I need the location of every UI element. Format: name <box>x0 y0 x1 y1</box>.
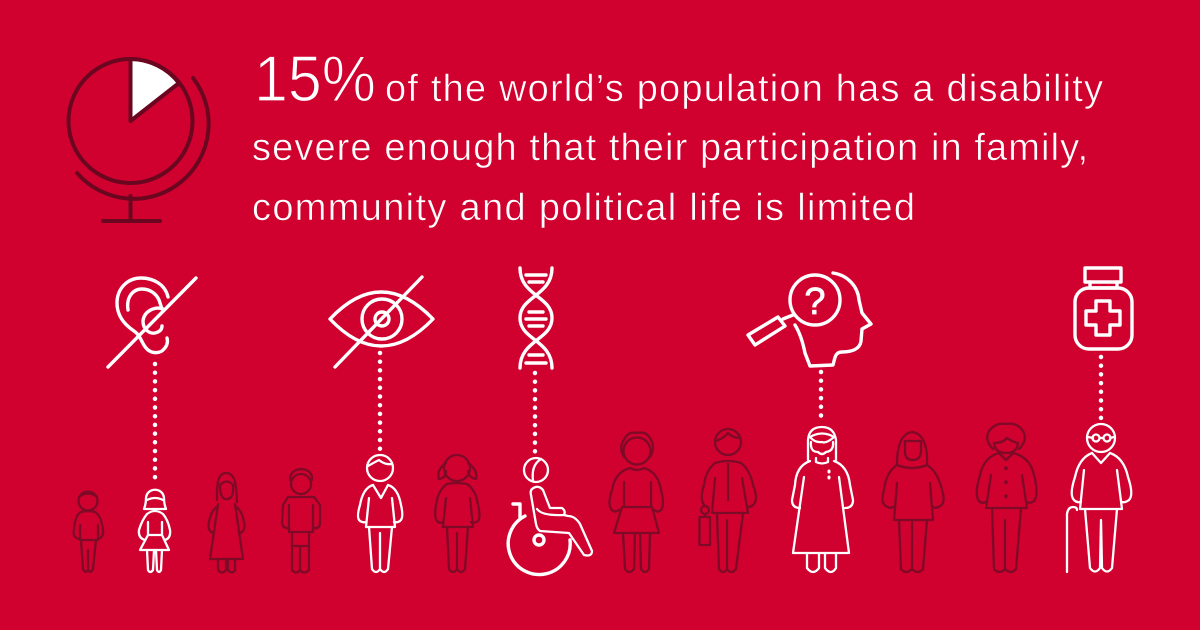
wheel and frame <box>508 504 570 575</box>
icon: DNA helix <box>520 268 552 368</box>
seated person <box>524 458 592 556</box>
figure: girl with bob, highlighted <box>139 490 170 572</box>
glasses <box>1088 437 1114 438</box>
briefcase <box>700 517 710 545</box>
figure: boy in V-neck, highlighted <box>358 455 402 572</box>
connector: DNA to wheelchair user <box>533 373 537 452</box>
figure: girl with pigtails <box>435 455 480 572</box>
cane <box>1067 507 1077 572</box>
figure: wheelchair user, highlighted <box>508 458 592 575</box>
figure: girl with long hair <box>209 473 244 572</box>
figure: man with briefcase <box>700 429 756 572</box>
figure: elderly man with glasses and cane, highlighted <box>1067 424 1131 572</box>
icon: head with magnifying glass <box>748 273 871 366</box>
heading: disability statistic: of the world’s population has a disability <box>385 68 1103 110</box>
connector: head to robed man <box>819 372 823 420</box>
connector: ear to child <box>153 364 157 482</box>
figure: woman in skirt <box>610 433 663 572</box>
connector: bottle to elderly man <box>1099 357 1103 418</box>
icon: crossed-out ear <box>108 278 196 367</box>
figure: woman in hijab <box>882 432 944 572</box>
connector: eye to boy <box>378 353 382 449</box>
question mark: ? <box>804 281 826 323</box>
heading: disability statistic <box>252 42 1103 229</box>
figure: woman with shirt buttons <box>977 424 1036 572</box>
figure: boy with curly hair <box>282 469 320 572</box>
icon: medicine bottle <box>1075 268 1132 349</box>
heading: disability statistic: community and political life is limited <box>252 187 915 229</box>
figure: small boy <box>74 492 103 572</box>
heading: disability statistic: severe enough that their participation in family, <box>252 127 1088 169</box>
figure: robed man with beard, highlighted <box>792 427 853 572</box>
heading: disability statistic: 15% <box>254 42 376 115</box>
icon: globe with 15% pie slice <box>68 59 209 221</box>
icon: crossed-out eye <box>330 277 433 367</box>
